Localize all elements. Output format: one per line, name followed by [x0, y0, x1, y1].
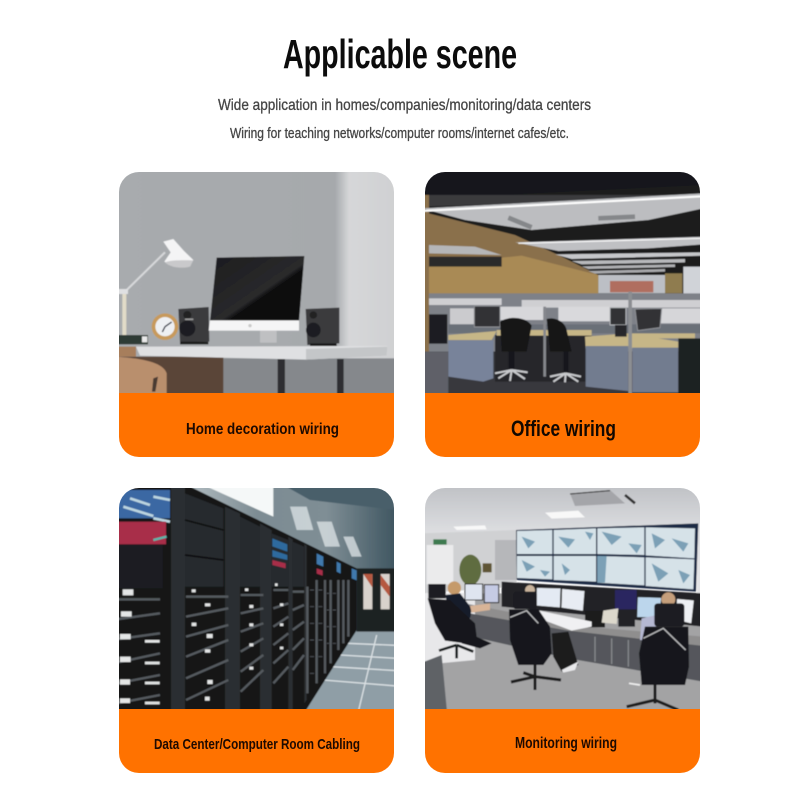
photo: server racks aisle: [117, 485, 397, 712]
subtitle text block: [218, 97, 591, 142]
subtitle text block: Wiring for teaching networks/computer rooms/internet cafes/etc.: [230, 125, 569, 142]
title: Applicable scene: [283, 31, 517, 77]
panel: office wiring: [422, 170, 703, 457]
label: monitoring wiring: Monitoring wiring: [515, 735, 617, 752]
photo: control room with video wall: [422, 485, 703, 712]
label: office wiring: Office wiring: [511, 416, 616, 441]
subtitle text block: Wide application in homes/companies/monitoring/data centers: [218, 97, 591, 114]
photo: desk with monitor, lamp and speakers: [117, 170, 397, 397]
label: data center cabling: Data Center/Computer Room Cabling: [154, 736, 360, 753]
panel: monitoring wiring: [422, 485, 703, 773]
panel: data center cabling: [117, 485, 397, 773]
photo: open-plan office: [422, 170, 703, 395]
label: home decoration wiring: Home decoration wiring: [186, 421, 339, 438]
panel: home decoration wiring: [117, 170, 397, 457]
